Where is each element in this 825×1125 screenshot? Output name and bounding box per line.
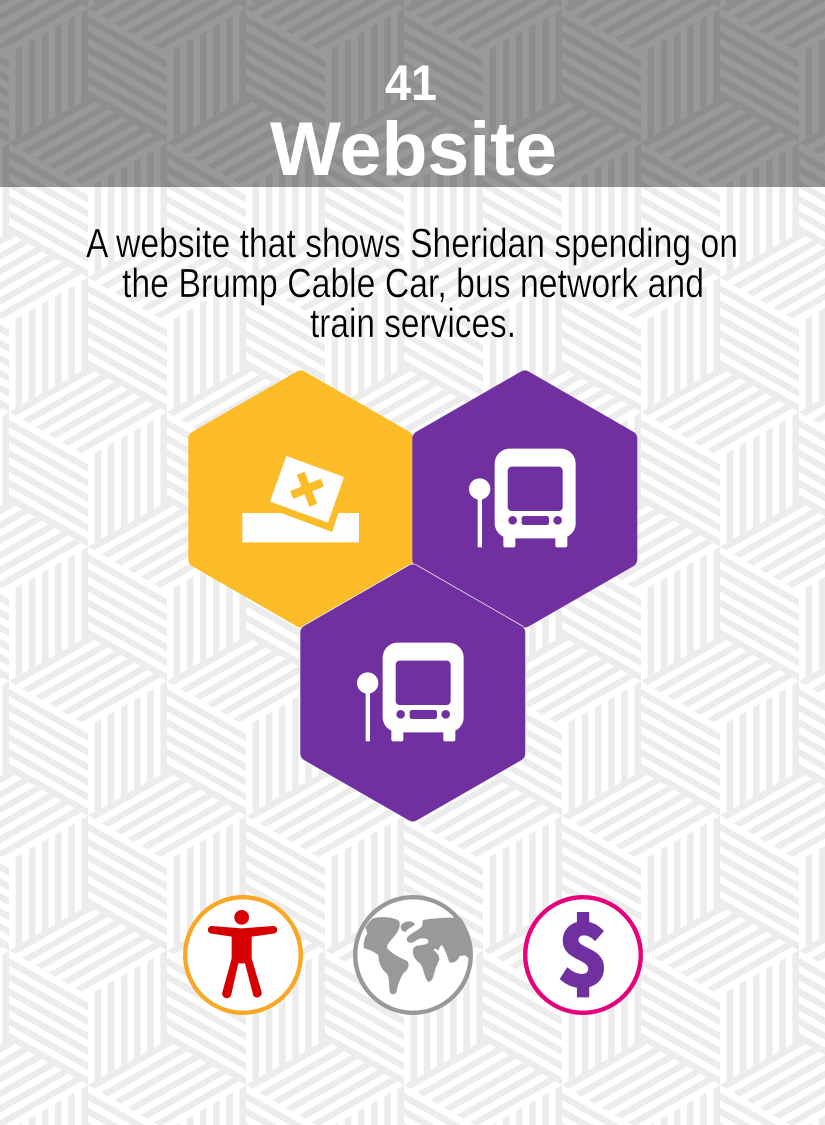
header band	[0, 0, 825, 187]
title number: 41	[385, 55, 437, 111]
icon: bus stop	[469, 449, 576, 547]
hexagon: bus on purple (top right)	[420, 378, 629, 620]
badge: dollar	[525, 889, 641, 1013]
description text: train services.	[310, 300, 516, 346]
badge: globe	[355, 897, 471, 1013]
icon: bus stop	[357, 643, 464, 741]
description text	[86, 220, 738, 346]
icon: ballot box	[242, 456, 359, 542]
icon: world map	[364, 917, 471, 994]
hexagon: voting on gold	[196, 378, 405, 620]
hexagon: bus on purple (bottom)	[308, 572, 517, 814]
title: Website	[270, 107, 557, 192]
icon: dollar sign: $	[558, 889, 608, 1010]
icon: human figure	[208, 910, 277, 998]
description text: the Brump Cable Car, bus network and	[122, 260, 704, 306]
badge: person	[185, 897, 301, 1013]
